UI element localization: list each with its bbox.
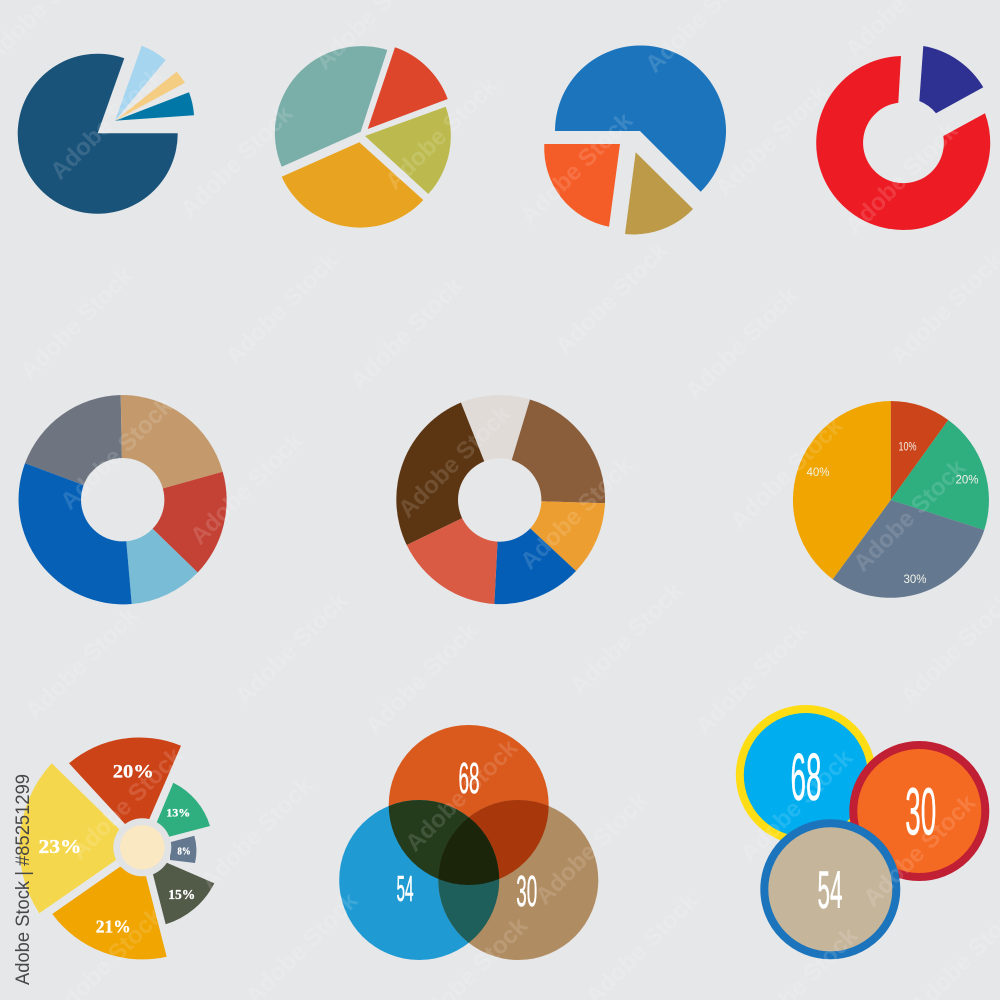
- overlap top and left: [388, 800, 469, 879]
- overlap top and right: [438, 800, 549, 879]
- watermark: Adobe Stock: [65, 742, 189, 865]
- slate 8% segment: [170, 836, 196, 863]
- tan circle with blue ring: [764, 823, 896, 955]
- chart: four slice pie: [275, 46, 451, 228]
- watermark: Adobe Stock: [345, 272, 469, 395]
- 30% slice: [833, 500, 984, 598]
- watermark: Adobe Stock: [15, 262, 139, 385]
- 40% slice: [793, 401, 891, 579]
- pale grey slice: [461, 395, 530, 500]
- chart: radial fan with percentages: [19, 737, 214, 959]
- watermark: Adobe Stock: [858, 789, 982, 912]
- chart: five slice donut: [19, 395, 227, 604]
- watermark: Adobe Stock: [515, 452, 639, 575]
- red ring: [816, 56, 990, 230]
- label 30%: 30%: [903, 574, 927, 586]
- watermark: Adobe Stock: [725, 412, 849, 535]
- watermark: Adobe Stock: [185, 427, 309, 550]
- watermark: Adobe Stock: [690, 617, 814, 740]
- blue slice: [555, 45, 726, 192]
- orange slice: [544, 144, 620, 227]
- watermark: Adobe Stock: [515, 107, 639, 230]
- hub: [120, 825, 165, 870]
- chart: overlapping ringed circles: 68: [790, 740, 822, 815]
- blue circle with yellow ring: [740, 709, 872, 841]
- stock credit, vertical: Adobe Stock | #85251299: [12, 774, 34, 985]
- watermark: Adobe Stock: [360, 617, 484, 740]
- right circle 30: [438, 800, 598, 960]
- olive slice: [365, 107, 451, 194]
- watermark: Adobe Stock: [735, 744, 859, 867]
- watermark: Adobe Stock: [848, 454, 972, 577]
- 10% slice: [891, 401, 948, 500]
- label 20%: 20%: [955, 474, 979, 486]
- chart: overlapping ringed circles: 30: [905, 774, 936, 850]
- watermark: Adobe Stock: [175, 100, 299, 223]
- watermark: Adobe Stock: [380, 72, 504, 195]
- watermark: Adobe Stock: [530, 787, 654, 910]
- chart: percentage pie: [793, 401, 989, 598]
- chart: three slice pie, blue: [544, 45, 726, 234]
- chart: venn diagram: 68: [458, 754, 480, 803]
- watermark: Adobe Stock: [220, 247, 344, 370]
- label 21%: 21%: [96, 916, 131, 936]
- donut hole: [458, 458, 541, 542]
- blue slice: [19, 463, 132, 604]
- hub ring: [113, 818, 171, 876]
- watermark: Adobe Stock: [565, 577, 689, 700]
- light blue slice: [115, 46, 166, 121]
- label 13%: 13%: [166, 806, 190, 820]
- watermark: Adobe Stock: [55, 392, 179, 515]
- grey slice: [25, 395, 123, 500]
- chart: six slice donut: [396, 395, 605, 604]
- watermark: Adobe Stock: [550, 237, 674, 360]
- watermark: Adobe Stock: [680, 282, 804, 405]
- label 8%: 8%: [178, 846, 190, 858]
- label 23%: 23%: [38, 836, 82, 858]
- amber slice: [282, 142, 423, 228]
- red slice: [368, 47, 448, 129]
- chart: venn diagram: [339, 725, 598, 960]
- orange circle with crimson ring: [853, 745, 985, 877]
- dark brown slice: [396, 402, 500, 545]
- yellow 23% segment: [19, 763, 119, 913]
- top circle 68: [389, 725, 549, 885]
- 20% slice: [891, 420, 989, 530]
- chart: venn diagram: 30: [516, 867, 537, 916]
- watermark: Adobe Stock: [195, 772, 319, 895]
- amber 21% segment: [52, 867, 167, 959]
- tan slice: [625, 152, 693, 234]
- green 13% segment: [156, 783, 210, 837]
- blue slice: [494, 500, 576, 604]
- watermark: Adobe Stock: [393, 400, 517, 523]
- left circle 54: [339, 800, 499, 960]
- teal slice: [275, 46, 387, 167]
- chart: venn diagram: 54: [396, 868, 414, 909]
- donut hole: [81, 458, 164, 541]
- main slice: [18, 54, 178, 214]
- chart: red and navy donut: [816, 46, 990, 230]
- coral slice: [407, 500, 500, 604]
- teal blue slice: [115, 92, 194, 121]
- overlap of all three: [438, 817, 500, 885]
- chart: overlapping ringed circles: 54: [818, 861, 842, 920]
- label 15%: 15%: [168, 887, 195, 902]
- label 20%: 20%: [113, 762, 154, 782]
- label 40%: 40%: [806, 467, 830, 479]
- label 10%: 10%: [898, 442, 916, 454]
- overlap left and right: [438, 817, 500, 943]
- dark 15% segment: [153, 862, 214, 924]
- red 20% segment: [69, 737, 181, 824]
- watermark: Adobe Stock: [230, 587, 354, 710]
- tan slice: [121, 395, 223, 500]
- watermark: Adobe Stock: [400, 734, 524, 857]
- orange slice: [500, 500, 605, 571]
- navy segment: [919, 46, 983, 113]
- light blue slice: [123, 500, 198, 604]
- watermark: Adobe Stock: [710, 79, 834, 202]
- pale orange slice: [115, 72, 185, 121]
- watermark: Adobe Stock: [45, 62, 169, 185]
- brown slice: [500, 400, 605, 503]
- chart: overlapping ringed circles: [740, 709, 985, 955]
- chart: exploded pie, dark blue: [18, 46, 194, 214]
- watermark: Adobe Stock: [840, 117, 964, 240]
- watermark: Adobe Stock: [20, 602, 144, 725]
- red slice: [123, 472, 227, 572]
